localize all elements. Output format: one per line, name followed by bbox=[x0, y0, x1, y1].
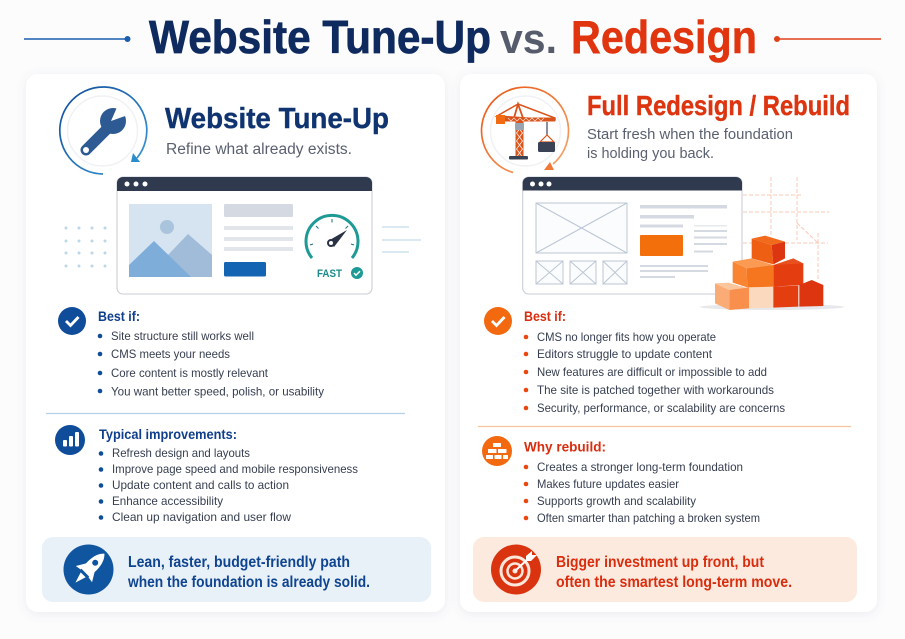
section: best if: The site is patched together with workarounds bbox=[537, 383, 774, 397]
blueprint grid bbox=[743, 177, 829, 280]
section: best if: Best if: bbox=[524, 308, 566, 324]
speed lines bbox=[382, 227, 421, 252]
section: typical improvements bbox=[99, 426, 358, 524]
section: why rebuild bbox=[524, 438, 760, 525]
title bbox=[149, 11, 757, 63]
section: typical improvements: Clean up navigation and user flow bbox=[112, 510, 291, 524]
section: why rebuild: Supports growth and scalability bbox=[537, 494, 696, 508]
subtitle: Start fresh when the foundation bbox=[587, 126, 793, 143]
speed gauge bbox=[306, 215, 363, 280]
wireframe image placeholders bbox=[536, 203, 627, 284]
section: best if: Security, performance, or scalability are concerns bbox=[537, 401, 785, 415]
panel: full redesign bbox=[460, 74, 877, 612]
subtitle bbox=[587, 126, 793, 162]
section: best if: CMS meets your needs bbox=[111, 347, 230, 361]
section: typical improvements: Improve page speed and mobile responsiveness bbox=[112, 462, 358, 476]
text placeholder lines bbox=[224, 204, 293, 276]
section: typical improvements: Update content and calls to action bbox=[112, 478, 289, 492]
callout text: Bigger investment up front, but bbox=[556, 554, 764, 571]
icon: target bbox=[491, 544, 541, 594]
callout text: often the smartest long-term move. bbox=[556, 574, 792, 591]
panel: website tune-up bbox=[26, 74, 445, 612]
icon: wrench bbox=[60, 87, 147, 174]
icon: bricks bbox=[482, 436, 512, 466]
heading: full redesign: Full Redesign / Rebuild bbox=[587, 90, 850, 121]
callout text bbox=[556, 554, 792, 591]
title: Website Tune-Up bbox=[149, 11, 491, 63]
title: Redesign bbox=[571, 11, 757, 63]
section: best if: New features are difficult or impossible to add bbox=[537, 365, 767, 379]
section: best if: Editors struggle to update content bbox=[537, 347, 713, 361]
callout text bbox=[127, 554, 370, 591]
icon: bar chart bbox=[55, 425, 85, 455]
section: best if: Best if: bbox=[98, 308, 140, 324]
section: best if: Core content is mostly relevant bbox=[111, 366, 269, 380]
section: best if: CMS no longer fits how you operate bbox=[537, 330, 716, 344]
wireframe text lines and button bbox=[640, 205, 727, 278]
browser mockup: tune-up bbox=[117, 177, 372, 294]
browser mockup: wireframe bbox=[523, 177, 742, 294]
icon: crane bbox=[482, 87, 569, 172]
section: typical improvements: Enhance accessibility bbox=[112, 494, 223, 508]
section: best if: Site structure still works well bbox=[111, 329, 254, 343]
callout: redesign bbox=[473, 537, 857, 602]
subtitle: is holding you back. bbox=[587, 145, 714, 162]
callout: tune-up bbox=[42, 537, 431, 602]
callout text: when the foundation is already solid. bbox=[127, 574, 370, 591]
subtitle: Refine what already exists. bbox=[166, 141, 352, 158]
section: why rebuild: Makes future updates easier bbox=[537, 477, 679, 491]
building blocks bbox=[700, 236, 844, 310]
section: typical improvements: Typical improvements: bbox=[99, 426, 237, 442]
section: best if: You want better speed, polish, or usability bbox=[111, 384, 324, 398]
icon: check bbox=[58, 307, 86, 335]
icon: rocket bbox=[64, 544, 114, 594]
speed gauge: FAST bbox=[317, 268, 342, 280]
section: why rebuild: Creates a stronger long-term foundation bbox=[537, 460, 743, 474]
icon: check bbox=[484, 307, 512, 335]
section: why rebuild: Often smarter than patching a broken system bbox=[537, 511, 760, 525]
callout text: Lean, faster, budget-friendly path bbox=[128, 554, 350, 571]
heading: website tune-up: Website Tune-Up bbox=[165, 103, 389, 135]
section: best if bbox=[98, 308, 324, 398]
image placeholder bbox=[129, 204, 212, 277]
decorative dots grid bbox=[64, 226, 106, 268]
title rule: right bbox=[774, 36, 881, 42]
section: why rebuild: Why rebuild: bbox=[524, 438, 606, 454]
title rule: left bbox=[24, 36, 130, 42]
title: vs. bbox=[500, 15, 557, 62]
section: typical improvements: Refresh design and layouts bbox=[112, 446, 250, 460]
section: best if bbox=[524, 308, 785, 415]
